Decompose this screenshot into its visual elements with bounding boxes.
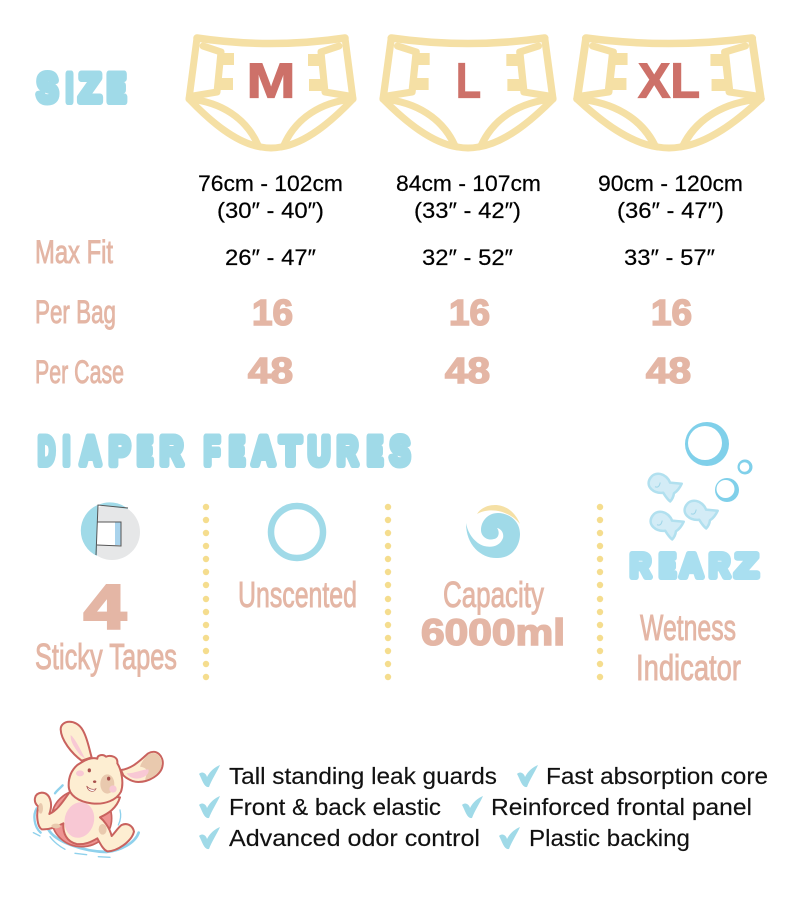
item: absorption core: Fast absorption core — [546, 763, 768, 789]
label line 2: Indicator — [636, 647, 741, 688]
heading: size: E — [107, 66, 126, 110]
waist measurements: M: 76cm - 102cm — [198, 171, 343, 196]
waist measurements: L: (33″ - 42″) — [414, 198, 521, 223]
face patch — [100, 774, 114, 794]
heading: diaper features: A — [252, 430, 275, 474]
icon: fish — [645, 471, 718, 541]
heading: diaper features: U — [308, 430, 330, 474]
dotted divider 3 — [597, 504, 603, 680]
heading: diaper features: E — [229, 430, 245, 474]
row: per case: Per Case — [35, 354, 124, 390]
heading: size: I — [66, 66, 73, 110]
brand wordmark — [630, 547, 758, 584]
diaper: size XL — [577, 38, 761, 148]
brand wordmark: R — [630, 547, 651, 584]
row: max fit: 32″ - 52″ — [422, 245, 513, 270]
item: leak guards: Tall standing leak guards — [229, 763, 497, 789]
row: max fit — [35, 234, 715, 270]
diaper: size L — [383, 38, 553, 148]
heading: diaper features — [38, 430, 410, 474]
brand wordmark: E — [659, 547, 676, 584]
row: per case: 48 — [445, 350, 490, 391]
waist measurements: M: (30″ - 40″) — [217, 198, 324, 223]
brand wordmark: A — [680, 547, 703, 584]
item: frontal panel: Reinforced frontal panel — [491, 794, 752, 820]
label: Sticky Tapes — [35, 636, 177, 677]
row: per bag: 16 — [449, 292, 490, 333]
label: Wetness — [640, 607, 736, 648]
heading: diaper features: I — [63, 430, 70, 474]
heading: diaper features: T — [280, 430, 301, 474]
feature: capacity — [421, 505, 565, 653]
number 4: 4 — [84, 573, 127, 642]
heading: size: Z — [79, 66, 101, 110]
row: max fit: 26″ - 47″ — [225, 245, 316, 270]
row: max fit: Max Fit — [35, 234, 113, 270]
icon: tape — [81, 502, 140, 560]
face — [87, 768, 110, 791]
feature: unscented — [238, 506, 357, 615]
row: per bag: 16 — [252, 292, 293, 333]
left ear inner — [71, 735, 85, 759]
heading: diaper features: F — [204, 430, 220, 474]
item: elastic: Front & back elastic — [229, 794, 441, 820]
illustration: bunny in swim ring — [33, 722, 163, 857]
brand wordmark: Z — [735, 547, 758, 584]
item: odor control: Advanced odor control — [229, 825, 480, 851]
feature: wetness indicator — [630, 422, 758, 688]
row: per case — [35, 350, 691, 391]
value: 6000ml — [421, 612, 565, 653]
dotted divider 2 — [385, 504, 391, 680]
head — [69, 755, 122, 804]
heading: diaper features: R — [337, 430, 358, 474]
size letter XL: XL — [638, 54, 700, 108]
heading: diaper features: P — [109, 430, 130, 474]
right ear inner — [127, 769, 149, 779]
left ear — [61, 722, 92, 761]
water — [33, 785, 139, 857]
belly — [61, 799, 98, 841]
waist measurements: XL: (36″ - 47″) — [617, 198, 724, 223]
diaper: size M — [189, 38, 353, 148]
body and legs — [35, 792, 134, 851]
label: Capacity — [443, 574, 544, 615]
icon: ring — [271, 506, 323, 558]
row: max fit: 33″ - 57″ — [624, 245, 715, 270]
waist measurements: XL: 90cm - 120cm — [598, 171, 743, 196]
row: per case: 48 — [248, 350, 293, 391]
leg patches — [38, 803, 107, 835]
heading: diaper features: D — [38, 430, 55, 474]
checklist — [199, 763, 768, 851]
brand wordmark: R — [709, 547, 730, 584]
heading: size: S — [37, 66, 58, 110]
icon: wave — [466, 505, 520, 558]
right ear tan patch — [140, 753, 162, 780]
dotted divider 1 — [203, 504, 209, 680]
size letter M: M — [246, 54, 296, 108]
waist measurements: M — [198, 171, 343, 223]
item: plastic backing: Plastic backing — [529, 825, 690, 851]
heading: diaper features: E — [137, 430, 153, 474]
waist measurements: L — [396, 171, 541, 223]
heading: diaper features: R — [160, 430, 183, 474]
heading: diaper features: E — [367, 430, 383, 474]
row: per bag: 16 — [651, 292, 692, 333]
heading: diaper features: A — [80, 430, 101, 474]
ring highlight — [55, 800, 67, 810]
waist measurements: L: 84cm - 107cm — [396, 171, 541, 196]
size letter L: L — [456, 54, 481, 108]
icon: bubbles — [685, 422, 752, 502]
waist measurements: XL — [598, 171, 743, 223]
feature: sticky tapes — [35, 502, 177, 677]
row: per case: 48 — [646, 350, 691, 391]
cheek spot — [109, 785, 117, 793]
left cheek — [76, 770, 84, 776]
right ear — [121, 752, 163, 782]
row: per bag — [35, 292, 692, 333]
label: Unscented — [238, 574, 357, 615]
heading: diaper features: S — [390, 430, 410, 474]
row: per bag: Per Bag — [35, 294, 116, 330]
heading: size — [37, 66, 126, 110]
swim ring — [52, 790, 112, 847]
